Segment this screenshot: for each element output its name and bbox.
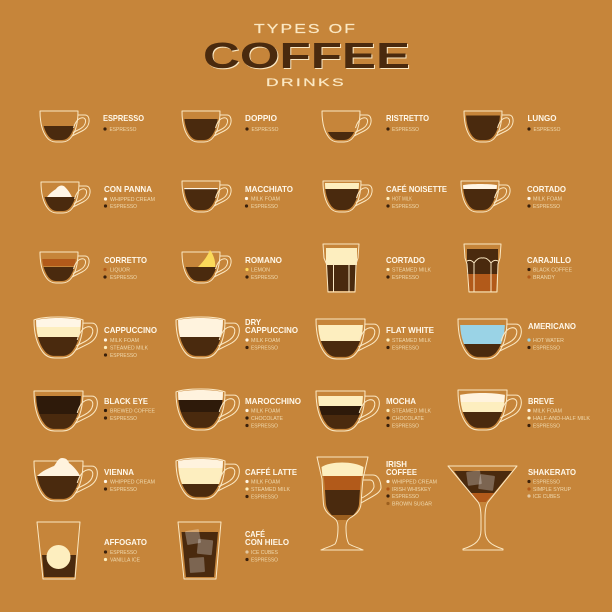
drink: cortado cup <box>460 180 566 212</box>
drink: macchiato: ESPRESSO <box>251 204 278 210</box>
drink: marocchino: MAROCCHINO <box>245 397 302 406</box>
drink: dry cappuccino <box>174 317 299 361</box>
drink: cappuccino: ESPRESSO <box>110 353 137 359</box>
drink: cortado glass: ESPRESSO <box>392 275 419 281</box>
drink: irish coffee: ESPRESSO <box>392 494 419 500</box>
drink: vienna: VIENNA <box>104 468 134 477</box>
drink: lungo <box>462 111 560 146</box>
drink: mocha: MOCHA <box>386 397 416 406</box>
drink: breve: HALF-AND-HALF MILK <box>533 416 590 422</box>
drink: mocha: CHOCOLATE <box>392 416 424 422</box>
drink: cortado glass: CORTADO <box>386 256 426 265</box>
drink: cortado cup: CORTADO <box>527 185 567 194</box>
drink: cappuccino: STEAMED MILK <box>110 346 148 352</box>
drink: irish coffee: IRISH WHISKEY <box>392 487 431 493</box>
drink: affogato <box>37 522 148 579</box>
drink: romano: ROMANO <box>245 256 283 265</box>
drink: cafe con hielo: ICE CUBES <box>251 550 278 556</box>
drink: affogato: ESPRESSO <box>110 550 137 556</box>
drink: americano: HOT WATER <box>533 338 564 344</box>
drink: carajillo <box>464 244 572 292</box>
drink: marocchino: MILK FOAM <box>251 408 280 414</box>
drink: corretto: ESPRESSO <box>110 275 137 281</box>
drink: macchiato: MILK FOAM <box>251 196 280 202</box>
drink: black eye: BLACK EYE <box>104 397 148 406</box>
drink: shakerato: SIMPLE SYRUP <box>533 487 571 493</box>
drink: cortado cup: ESPRESSO <box>533 204 560 210</box>
drink: ristretto: RISTRETTO <box>386 114 430 123</box>
drink: flat white <box>314 319 435 363</box>
drink: irish coffee: IRISH <box>386 460 407 469</box>
title <box>203 22 411 89</box>
drink: irish coffee <box>317 457 437 550</box>
drink: vienna: ESPRESSO <box>110 487 137 493</box>
drink: breve: MILK FOAM <box>533 408 562 414</box>
drink: marocchino: ESPRESSO <box>251 424 278 430</box>
drink: corretto <box>40 252 147 284</box>
drink: caffe latte: MILK FOAM <box>251 480 280 486</box>
drink: caffe latte: STEAMED MILK <box>251 487 290 493</box>
drink: shakerato <box>448 466 577 550</box>
drink: dry cappuccino: DRY <box>245 318 262 327</box>
drink: romano: ESPRESSO <box>251 275 278 281</box>
drink: espresso: ESPRESSO <box>110 127 136 133</box>
drink: macchiato: MACCHIATO <box>245 185 294 194</box>
drink: dry cappuccino: ESPRESSO <box>251 346 278 352</box>
drink: romano <box>182 250 282 284</box>
drink: con panna: ESPRESSO <box>110 204 137 210</box>
drink: con panna: CON PANNA <box>104 185 152 194</box>
drink: cafe con hielo <box>178 522 290 579</box>
drink: irish coffee: BROWN SUGAR <box>392 502 432 508</box>
drink: carajillo: BRANDY <box>533 275 555 281</box>
drink: cafe noisette: ESPRESSO <box>392 204 419 210</box>
drink: cappuccino: MILK FOAM <box>110 338 139 344</box>
drink: breve: ESPRESSO <box>533 424 560 430</box>
drink: romano: LEMON <box>251 268 270 274</box>
drink: black eye <box>34 390 155 432</box>
drink: caffe latte <box>176 458 297 500</box>
drink: cafe con hielo: CAFÉ <box>245 529 265 539</box>
drink: breve <box>458 390 590 430</box>
drink: cortado cup: MILK FOAM <box>533 196 562 202</box>
drink: marocchino <box>176 388 301 430</box>
drink: black eye: BREWED COFFEE <box>110 408 155 414</box>
drink: flat white: ESPRESSO <box>392 346 419 352</box>
drink: irish coffee: WHIPPED CREAM <box>392 480 437 486</box>
drink: caffe latte: CAFFÉ LATTE <box>245 467 297 477</box>
drink: breve: BREVE <box>528 397 554 406</box>
title: TYPES OF <box>254 22 357 36</box>
drink: cafe con hielo: CON HIELO <box>245 538 290 547</box>
drink: cafe noisette: CAFÉ NOISETTE <box>386 184 447 194</box>
drink: mocha: STEAMED MILK <box>392 408 431 414</box>
drink: irish coffee: COFFEE <box>386 468 417 477</box>
drink: con panna: WHIPPED CREAM <box>110 197 155 203</box>
drink: flat white: STEAMED MILK <box>392 338 431 344</box>
drink: mocha: ESPRESSO <box>392 424 419 430</box>
drink: affogato: VANILLA ICE <box>110 558 140 564</box>
drink: lungo: ESPRESSO <box>534 127 560 133</box>
drink: dry cappuccino: CAPPUCCINO <box>245 326 299 335</box>
drink: black eye: ESPRESSO <box>110 416 137 422</box>
drink: flat white: FLAT WHITE <box>386 326 435 335</box>
drink: americano: ESPRESSO <box>533 346 560 352</box>
title: COFFEE <box>203 35 410 76</box>
drink: cafe noisette <box>322 180 447 212</box>
drink: cappuccino: CAPPUCCINO <box>104 326 158 335</box>
drink: carajillo: CARAJILLO <box>527 256 572 265</box>
drink: cortado glass <box>323 244 431 292</box>
drink: doppio: ESPRESSO <box>252 127 278 133</box>
drink: ristretto <box>322 110 429 142</box>
drink: doppio: DOPPIO <box>245 114 278 123</box>
drink: doppio <box>180 111 278 146</box>
drink: cappuccino <box>32 317 158 361</box>
drink: dry cappuccino: MILK FOAM <box>251 338 280 344</box>
drink: shakerato: SHAKERATO <box>528 468 577 477</box>
title: COFFEE <box>204 36 411 77</box>
drink: americano <box>458 318 576 360</box>
drink: corretto: CORRETTO <box>104 256 148 265</box>
drink: ristretto: ESPRESSO <box>392 127 419 133</box>
drink: corretto: LIQUOR <box>110 268 130 274</box>
drink: cafe con hielo: ESPRESSO <box>251 558 278 564</box>
drink: marocchino: CHOCOLATE <box>251 416 283 422</box>
drink: lungo: LUNGO <box>528 114 557 123</box>
title: DRINKS <box>266 77 346 89</box>
drink: espresso: ESPRESSO <box>103 114 145 123</box>
drink: cafe noisette: HOT MILK <box>392 196 412 202</box>
drink: carajillo: BLACK COFFEE <box>533 268 572 274</box>
drink: shakerato: ICE CUBES <box>533 494 560 500</box>
drink: cortado glass: STEAMED MILK <box>392 268 431 274</box>
drink: espresso <box>40 110 144 142</box>
drink: con panna <box>39 182 155 217</box>
drink: vienna: WHIPPED CREAM <box>110 480 155 486</box>
drink: vienna <box>34 458 155 502</box>
drink: caffe latte: ESPRESSO <box>251 494 278 500</box>
drink: mocha <box>316 390 431 432</box>
drink: americano: AMERICANO <box>528 322 577 331</box>
drink: affogato: AFFOGATO <box>104 538 148 547</box>
drink: shakerato: ESPRESSO <box>533 480 560 486</box>
drink: macchiato <box>182 180 293 212</box>
